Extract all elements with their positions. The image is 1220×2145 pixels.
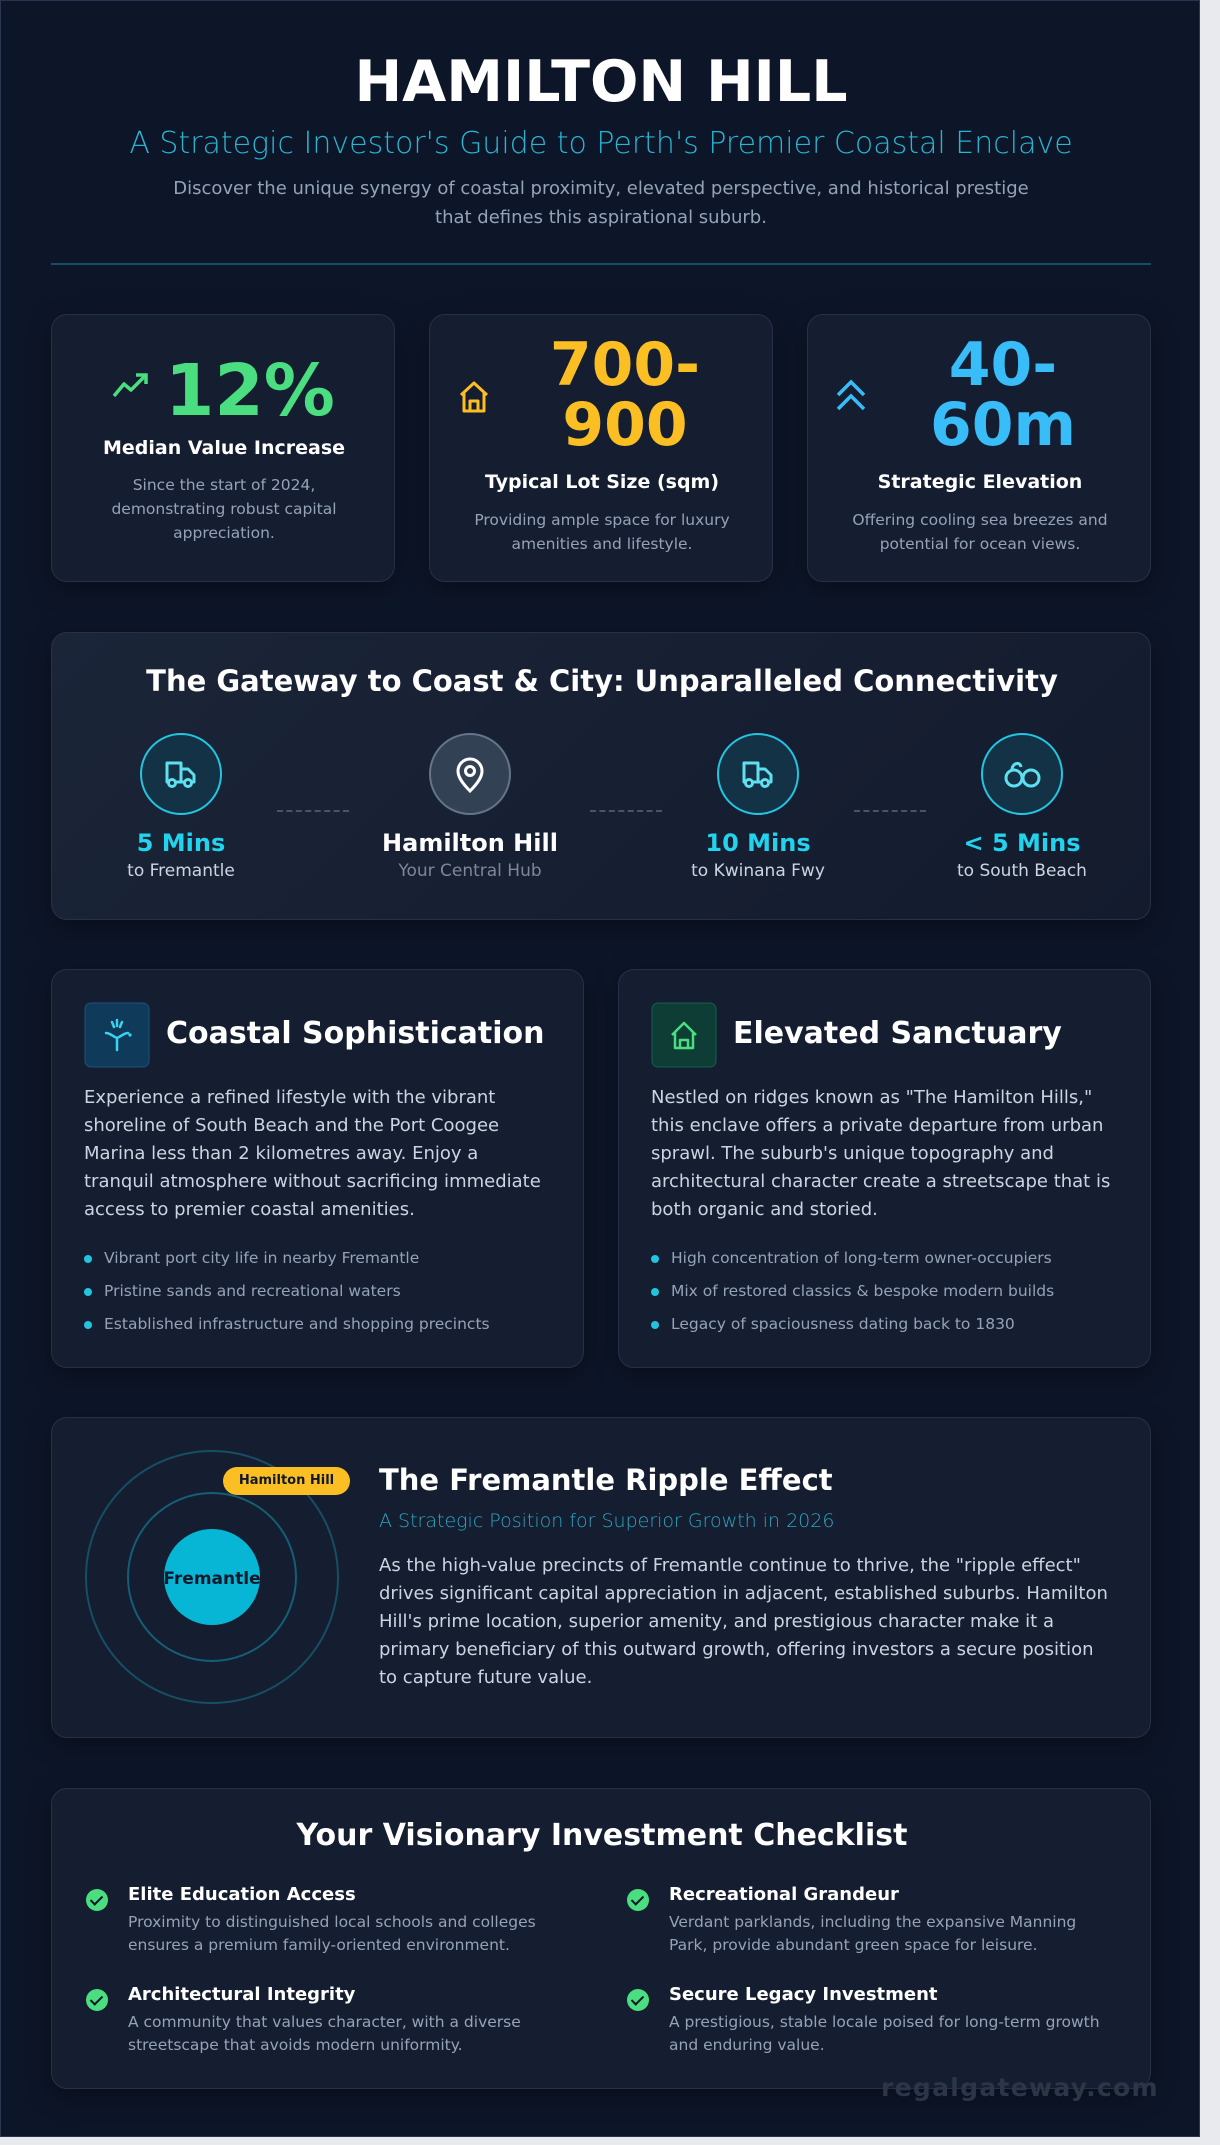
description: Providing ample space for luxury amenities and lifestyle. (474, 511, 730, 553)
bullet list (651, 1249, 1054, 1333)
icon: fountain (84, 1002, 150, 1068)
icon: house (652, 1002, 716, 1068)
node: Hamilton Hill: Your Central Hub (398, 861, 542, 881)
node: Kwinana Fwy: 10 Mins (705, 829, 811, 857)
node: Hamilton Hill: Hamilton Hill (382, 829, 558, 857)
item: education (86, 1884, 536, 1954)
heading: Elevated Sanctuary (733, 1016, 1062, 1051)
text block: As the high-value precincts of Fremantle continue to thrive, the "ripple effect" drives significant capital appreciation in adjacent, established suburbs. Hamilton Hill's prime location, superior amenity, and prestigious character make it a primary beneficiary of this outward growth, offering investors a secure position to capture future value. (379, 1555, 1108, 1688)
node: South Beach: < 5 Mins (964, 829, 1080, 857)
item: legacy (627, 1984, 1100, 2054)
panel: elevated sanctuary (618, 969, 1151, 1368)
label: Strategic Elevation (878, 471, 1082, 493)
bullet list: Mix of restored classics & bespoke modern builds (671, 1282, 1054, 1300)
item: architecture: A community that values character, with a diverse streetscape that avoids modern uniformity. (128, 2013, 521, 2054)
item: recreation: Recreational Grandeur (669, 1884, 899, 1905)
value: 60m (930, 390, 1076, 460)
watermark: regalgateway.com (881, 2073, 1159, 2102)
node: Fremantle: to Fremantle (127, 861, 235, 881)
description: Since the start of 2024, demonstrating robust capital appreciation. (111, 476, 337, 542)
icon: house (460, 381, 488, 412)
panel: connectivity (51, 632, 1151, 920)
icon: trend up (112, 373, 148, 398)
item: education: Proximity to distinguished local schools and colleges ensures a premium family-oriented environment. (128, 1913, 536, 1954)
bullet list: Vibrant port city life in nearby Fremantle (104, 1249, 419, 1267)
node: Kwinana Fwy: to Kwinana Fwy (691, 861, 825, 881)
value: 900 (562, 390, 688, 460)
node: Kwinana Fwy (691, 733, 825, 881)
intro text: that defines this aspirational suburb. (435, 207, 767, 228)
label: Typical Lot Size (sqm) (485, 471, 719, 493)
panel: ripple effect (51, 1417, 1151, 1738)
value: 700- (550, 330, 700, 400)
intro text: Discover the unique synergy of coastal proximity, elevated perspective, and historical prestige (173, 178, 1029, 199)
icon: rings (981, 733, 1063, 815)
panel: checklist (51, 1788, 1151, 2089)
item: legacy: Secure Legacy Investment (669, 1984, 938, 2005)
badge (223, 1467, 350, 1495)
ripple diagram: Fremantle (163, 1569, 261, 1589)
bullet list: Established infrastructure and shopping precincts (104, 1315, 490, 1333)
item: architecture: Architectural Integrity (128, 1984, 355, 2005)
badge: Hamilton Hill (239, 1473, 334, 1488)
bullet list: High concentration of long-term owner-occupiers (671, 1249, 1052, 1267)
node: South Beach: to South Beach (957, 861, 1087, 881)
subtitle: A Strategic Investor's Guide to Perth's Premier Coastal Enclave (129, 126, 1073, 161)
icon: truck (140, 733, 222, 815)
intro text (173, 178, 1029, 228)
item: education: Elite Education Access (128, 1884, 356, 1905)
icon: pin (429, 733, 511, 815)
stat card: elevation (807, 314, 1151, 582)
heading: Coastal Sophistication (166, 1016, 544, 1051)
icon: chevrons up (836, 380, 866, 410)
title: HAMILTON HILL (354, 49, 848, 115)
description: Offering cooling sea breezes and potential for ocean views. (852, 511, 1108, 553)
label: Median Value Increase (103, 437, 345, 459)
bullet list: Pristine sands and recreational waters (104, 1282, 401, 1300)
node: Fremantle: 5 Mins (137, 829, 225, 857)
stat card: lot size (429, 314, 773, 582)
item: recreation (627, 1884, 1076, 1954)
icon: truck (717, 733, 799, 815)
ripple diagram (85, 1450, 339, 1704)
text block: Experience a refined lifestyle with the vibrant shoreline of South Beach and the Port Coogee Marina less than 2 kilometres away. Enjoy a tranquil atmosphere without sacrificing immediate access to premier coastal amenities. (84, 1087, 541, 1220)
panel: coastal sophistication (51, 969, 584, 1368)
item: legacy: A prestigious, stable locale poised for long-term growth and enduring value. (669, 2013, 1100, 2054)
heading: Your Visionary Investment Checklist (297, 1818, 907, 1853)
node: Fremantle (127, 733, 235, 881)
subheading: A Strategic Position for Superior Growth in 2026 (379, 1510, 834, 1532)
text block: Nestled on ridges known as "The Hamilton Hills," this enclave offers a private departure from urban sprawl. The suburb's unique topography and architectural character create a streetscape that is both organic and storied. (651, 1087, 1110, 1220)
node: Hamilton Hill (382, 733, 558, 881)
heading: The Fremantle Ripple Effect (379, 1463, 833, 1497)
value (550, 330, 700, 460)
bullet list: Legacy of spaciousness dating back to 1830 (671, 1315, 1015, 1333)
node: South Beach (957, 733, 1087, 881)
stat card: median value (51, 314, 395, 582)
value: 12% (165, 349, 335, 432)
value (930, 330, 1076, 460)
bullet list (84, 1249, 490, 1333)
heading: The Gateway to Coast & City: Unparalleled Connectivity (146, 664, 1058, 698)
value: 40- (949, 330, 1057, 400)
item: recreation: Verdant parklands, including the expansive Manning Park, provide abundant green space for leisure. (669, 1913, 1076, 1954)
item: architecture (86, 1984, 521, 2054)
